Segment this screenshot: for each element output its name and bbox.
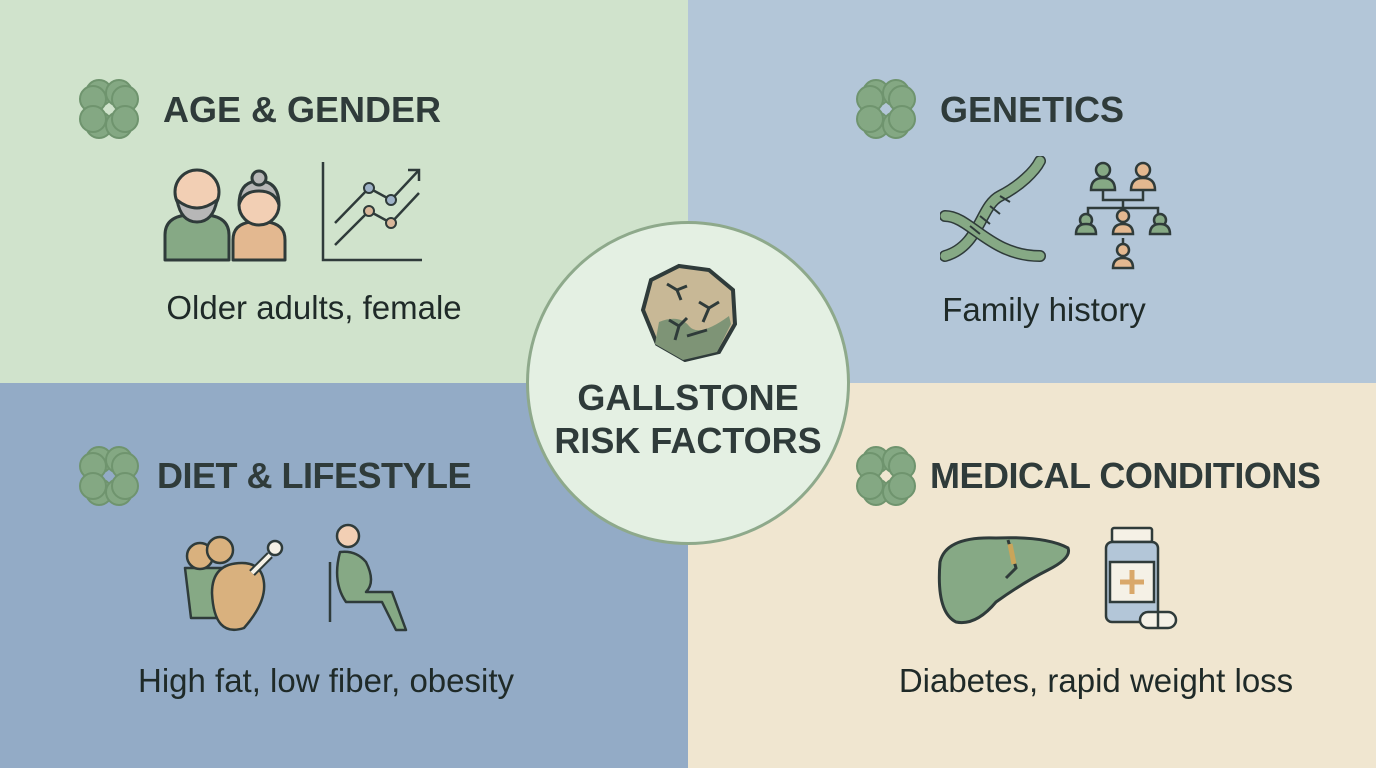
icon: clover 1 bbox=[79, 79, 139, 139]
icon: clover 2 bbox=[856, 79, 916, 139]
title: gallstone risk factors bbox=[554, 377, 822, 461]
icon: clover 4 bbox=[856, 446, 916, 506]
icon: elderly couple bbox=[164, 168, 286, 262]
title: age & gender: AGE & GENDER bbox=[163, 89, 441, 130]
icon: clover 3 bbox=[79, 446, 139, 506]
icon: dna bbox=[940, 156, 1046, 262]
icon: family tree bbox=[1074, 162, 1172, 270]
icon: fried food bbox=[184, 536, 284, 632]
center circle bbox=[526, 221, 850, 545]
icon: gallstone bbox=[640, 264, 737, 362]
text: diet & lifestyle: High fat, low fiber, obesity bbox=[138, 662, 514, 699]
text: medical conditions: Diabetes, rapid weight loss bbox=[899, 662, 1293, 699]
text: age & gender: Older adults, female bbox=[166, 289, 462, 326]
title: gallstone risk factors: RISK FACTORS bbox=[554, 420, 822, 461]
icon: pill bottle bbox=[1104, 526, 1178, 630]
panel: medical conditions bbox=[688, 383, 1376, 768]
icon: sitting person bbox=[328, 524, 408, 632]
title: gallstone risk factors: GALLSTONE bbox=[577, 377, 799, 418]
panel: age & gender bbox=[0, 0, 688, 383]
title: diet & lifestyle: DIET & LIFESTYLE bbox=[157, 455, 471, 496]
panel: diet & lifestyle bbox=[0, 383, 688, 768]
panel: genetics bbox=[688, 0, 1376, 383]
text: genetics: Family history bbox=[942, 291, 1146, 328]
icon: line chart bbox=[322, 162, 422, 262]
icon: liver bbox=[938, 536, 1070, 624]
title: genetics: GENETICS bbox=[940, 89, 1124, 130]
title: medical conditions: MEDICAL CONDITIONS bbox=[930, 455, 1320, 496]
